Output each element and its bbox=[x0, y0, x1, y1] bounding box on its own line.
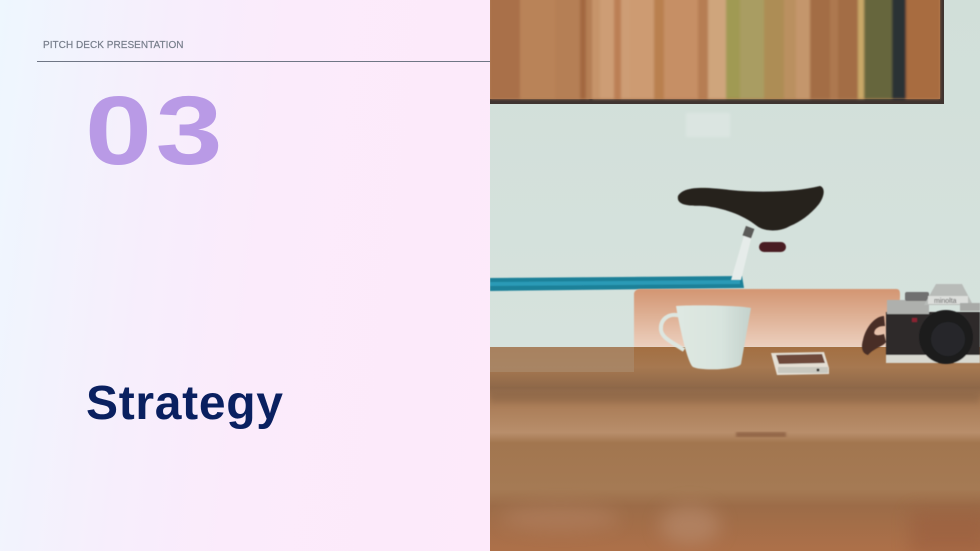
wall highlight bbox=[686, 113, 730, 137]
bicycle rear light bbox=[759, 242, 786, 252]
wooden table bbox=[490, 347, 980, 551]
section title: Strategy bbox=[86, 377, 284, 430]
bicycle seat post bbox=[731, 226, 754, 280]
vintage camera: minolta bbox=[934, 298, 957, 305]
header rule bbox=[37, 61, 490, 62]
bicycle saddle bbox=[678, 186, 824, 230]
smartphone bbox=[771, 352, 829, 375]
section label: PITCH DECK PRESENTATION bbox=[43, 40, 184, 51]
coffee cup bbox=[661, 305, 751, 369]
vintage camera bbox=[862, 284, 980, 364]
bicycle frame bar bbox=[490, 276, 744, 291]
wooden wall painting bbox=[490, 0, 944, 104]
wall bbox=[490, 0, 980, 350]
section number: 03 bbox=[85, 76, 226, 185]
photo: desk with cup, phone, camera and bicycle seat bbox=[490, 0, 980, 551]
panel: left gradient background bbox=[0, 0, 490, 551]
wooden chair back bbox=[634, 289, 900, 347]
